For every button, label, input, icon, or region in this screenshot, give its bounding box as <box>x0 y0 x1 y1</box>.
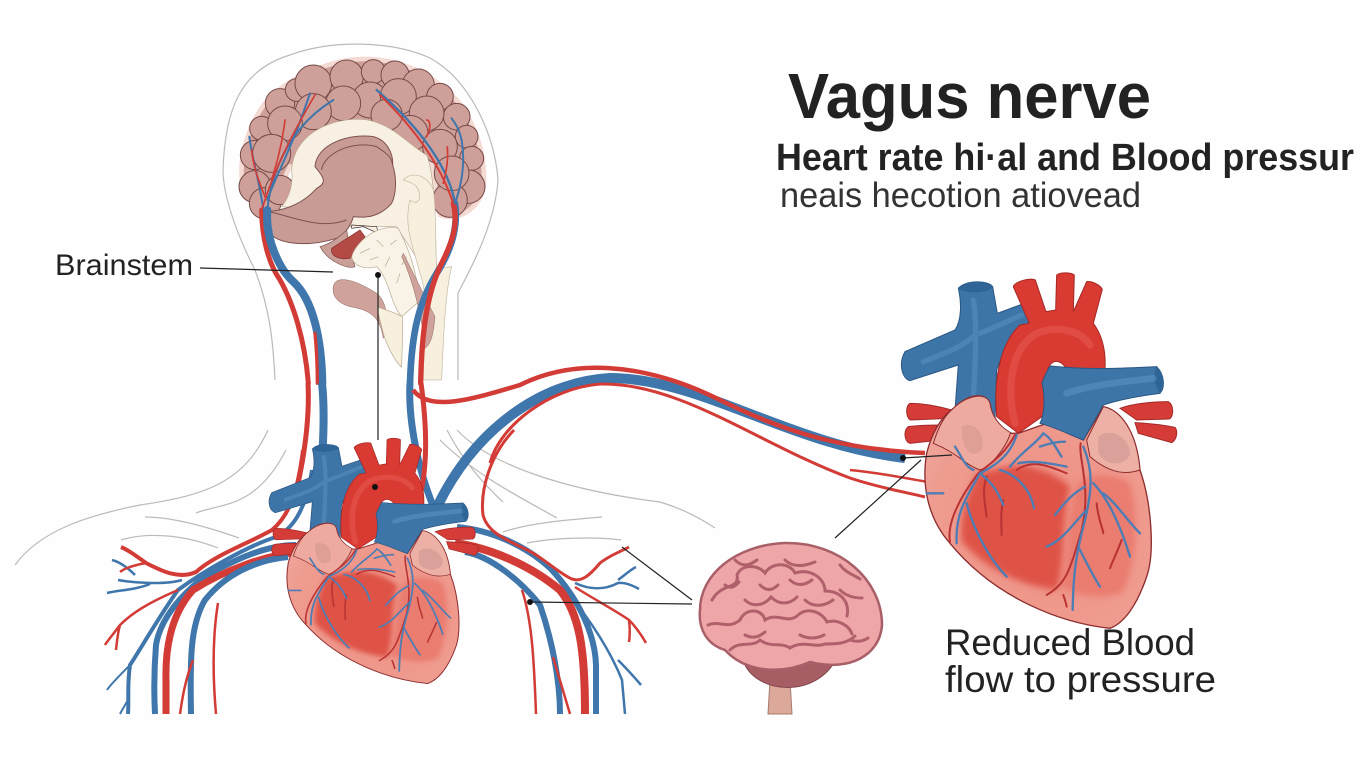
spinal pink <box>402 253 435 348</box>
cerebellum stem <box>352 227 421 317</box>
small brain <box>700 543 882 714</box>
cream interior <box>282 119 437 273</box>
neck and head vessels <box>249 90 463 383</box>
title: Vagus nerve <box>788 60 1151 132</box>
large heart <box>901 273 1177 628</box>
small heart in chest <box>269 438 478 684</box>
label: reduced blood flow <box>945 622 1216 700</box>
label: reduced blood flow: Reduced Blood <box>945 622 1195 663</box>
brain base with halo <box>242 59 484 217</box>
leader dots <box>372 272 906 605</box>
red nucleus <box>320 230 355 267</box>
head and body outline <box>15 44 715 565</box>
label: reduced blood flow: flow to pressure <box>945 659 1216 700</box>
description line: neais hecotion atiovead <box>780 176 1141 215</box>
brain cross-section in head <box>239 59 485 383</box>
brainstem tail <box>377 307 403 367</box>
thalamus detail <box>268 145 393 224</box>
rear bone <box>403 175 452 380</box>
label: brainstem: Brainstem <box>55 249 193 282</box>
brain lobes <box>239 60 485 219</box>
deep brain mass <box>265 136 396 244</box>
nerve and vessel network <box>105 368 945 714</box>
pink tube <box>333 280 387 338</box>
leader lines <box>200 268 952 604</box>
